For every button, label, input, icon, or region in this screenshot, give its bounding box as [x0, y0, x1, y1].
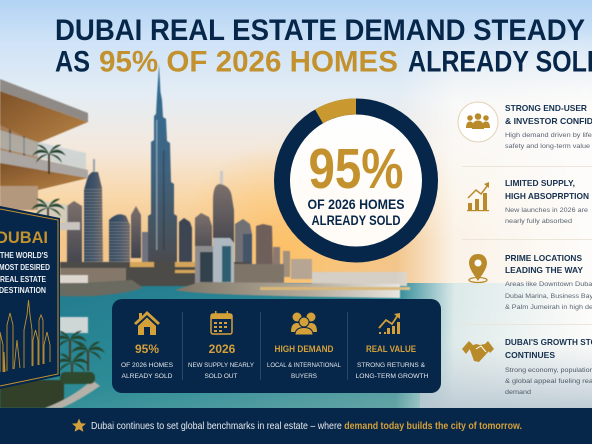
book text: THE WORLD'S [0, 251, 49, 260]
driver 3: prime locations: PRIME LOCATIONS [505, 253, 582, 263]
right side fade [398, 44, 592, 408]
stat: high demand [267, 312, 341, 380]
stats panel [112, 299, 441, 393]
stat: 95% [121, 311, 173, 380]
icon: people [291, 312, 317, 335]
donut caption [308, 197, 404, 228]
icon: star [72, 418, 86, 432]
icon: calendar [211, 311, 232, 334]
water [0, 283, 592, 408]
book text: MOST DESIRED [0, 263, 50, 272]
book text: REAL ESTATE [0, 275, 47, 284]
donut caption: ALREADY SOLD [312, 213, 401, 228]
book text [0, 251, 50, 295]
driver 2: limited supply: nearly fully absorbed [505, 218, 572, 225]
driver 2: limited supply: HIGH ABSOPRPTION [505, 191, 589, 201]
stat: high demand: HIGH DEMAND [274, 344, 334, 354]
stat: 95%: OF 2026 HOMES [121, 362, 173, 369]
title [55, 14, 592, 78]
donut value: 95% [308, 137, 404, 201]
stat: 2026: SOLD OUT [204, 373, 238, 380]
driver 4: growth story [462, 337, 592, 396]
driver 3: prime locations: Areas like Downtown Dubai, [505, 281, 592, 288]
title: AS [55, 46, 90, 78]
stat: 2026 [188, 311, 254, 380]
title: 95% OF 2026 HOMES [99, 46, 398, 78]
book: Dubai destination panel [0, 206, 60, 389]
driver 3: prime locations: Dubai Marina, Business Bay [505, 293, 592, 300]
icon: map pin [469, 254, 487, 282]
stat: real value: REAL VALUE [366, 344, 416, 354]
icon: growth chart [379, 313, 400, 334]
book gold skyline [0, 300, 50, 372]
stat: real value: LONG-TERM GROWTH [356, 373, 429, 380]
driver 3: prime locations: LEADING THE WAY [505, 265, 583, 275]
icon: investors [458, 102, 498, 142]
icon: handshake [462, 341, 494, 362]
book text: DESTINATION [0, 286, 46, 295]
stat: 2026: NEW SUPPLY NEARLY [188, 362, 254, 369]
right column: key drivers [458, 102, 592, 396]
stat: high demand: BUYERS [291, 373, 317, 380]
driver 1: end-user confidence: STRONG END-USER [505, 103, 587, 113]
stat: real value: STRONG RETURNS & [357, 362, 425, 369]
stat: high demand: LOCAL & INTERNATIONAL [267, 362, 341, 369]
driver 4: growth story: demand [505, 389, 531, 396]
driver 2: limited supply: LIMITED SUPPLY, [505, 178, 575, 188]
driver 1: end-user confidence: safety and long-term value [505, 143, 590, 150]
donut chart: 95% sold [281, 106, 431, 256]
left residential building [0, 79, 105, 408]
stat: 95%: ALREADY SOLD [122, 373, 173, 380]
footer banner [0, 408, 592, 444]
icon: house [134, 311, 160, 335]
stat: 95%: 95% [135, 342, 159, 356]
donut caption: OF 2026 HOMES [308, 197, 404, 212]
icon: bar chart with arrow [467, 182, 489, 211]
driver 2: limited supply [467, 178, 589, 225]
skyline [60, 64, 410, 298]
driver 4: growth story: CONTINUES [505, 350, 555, 360]
footer text: Dubai continues to set global benchmarks in real estate – where demand today builds the city of tomorrow. [91, 420, 522, 432]
driver 1: end-user confidence [458, 102, 592, 150]
driver 3: prime locations [469, 253, 592, 311]
stat: real value [356, 313, 429, 380]
stat: 2026: 2026 [209, 342, 236, 356]
driver 2: limited supply: New launches in 2026 are [505, 207, 588, 214]
